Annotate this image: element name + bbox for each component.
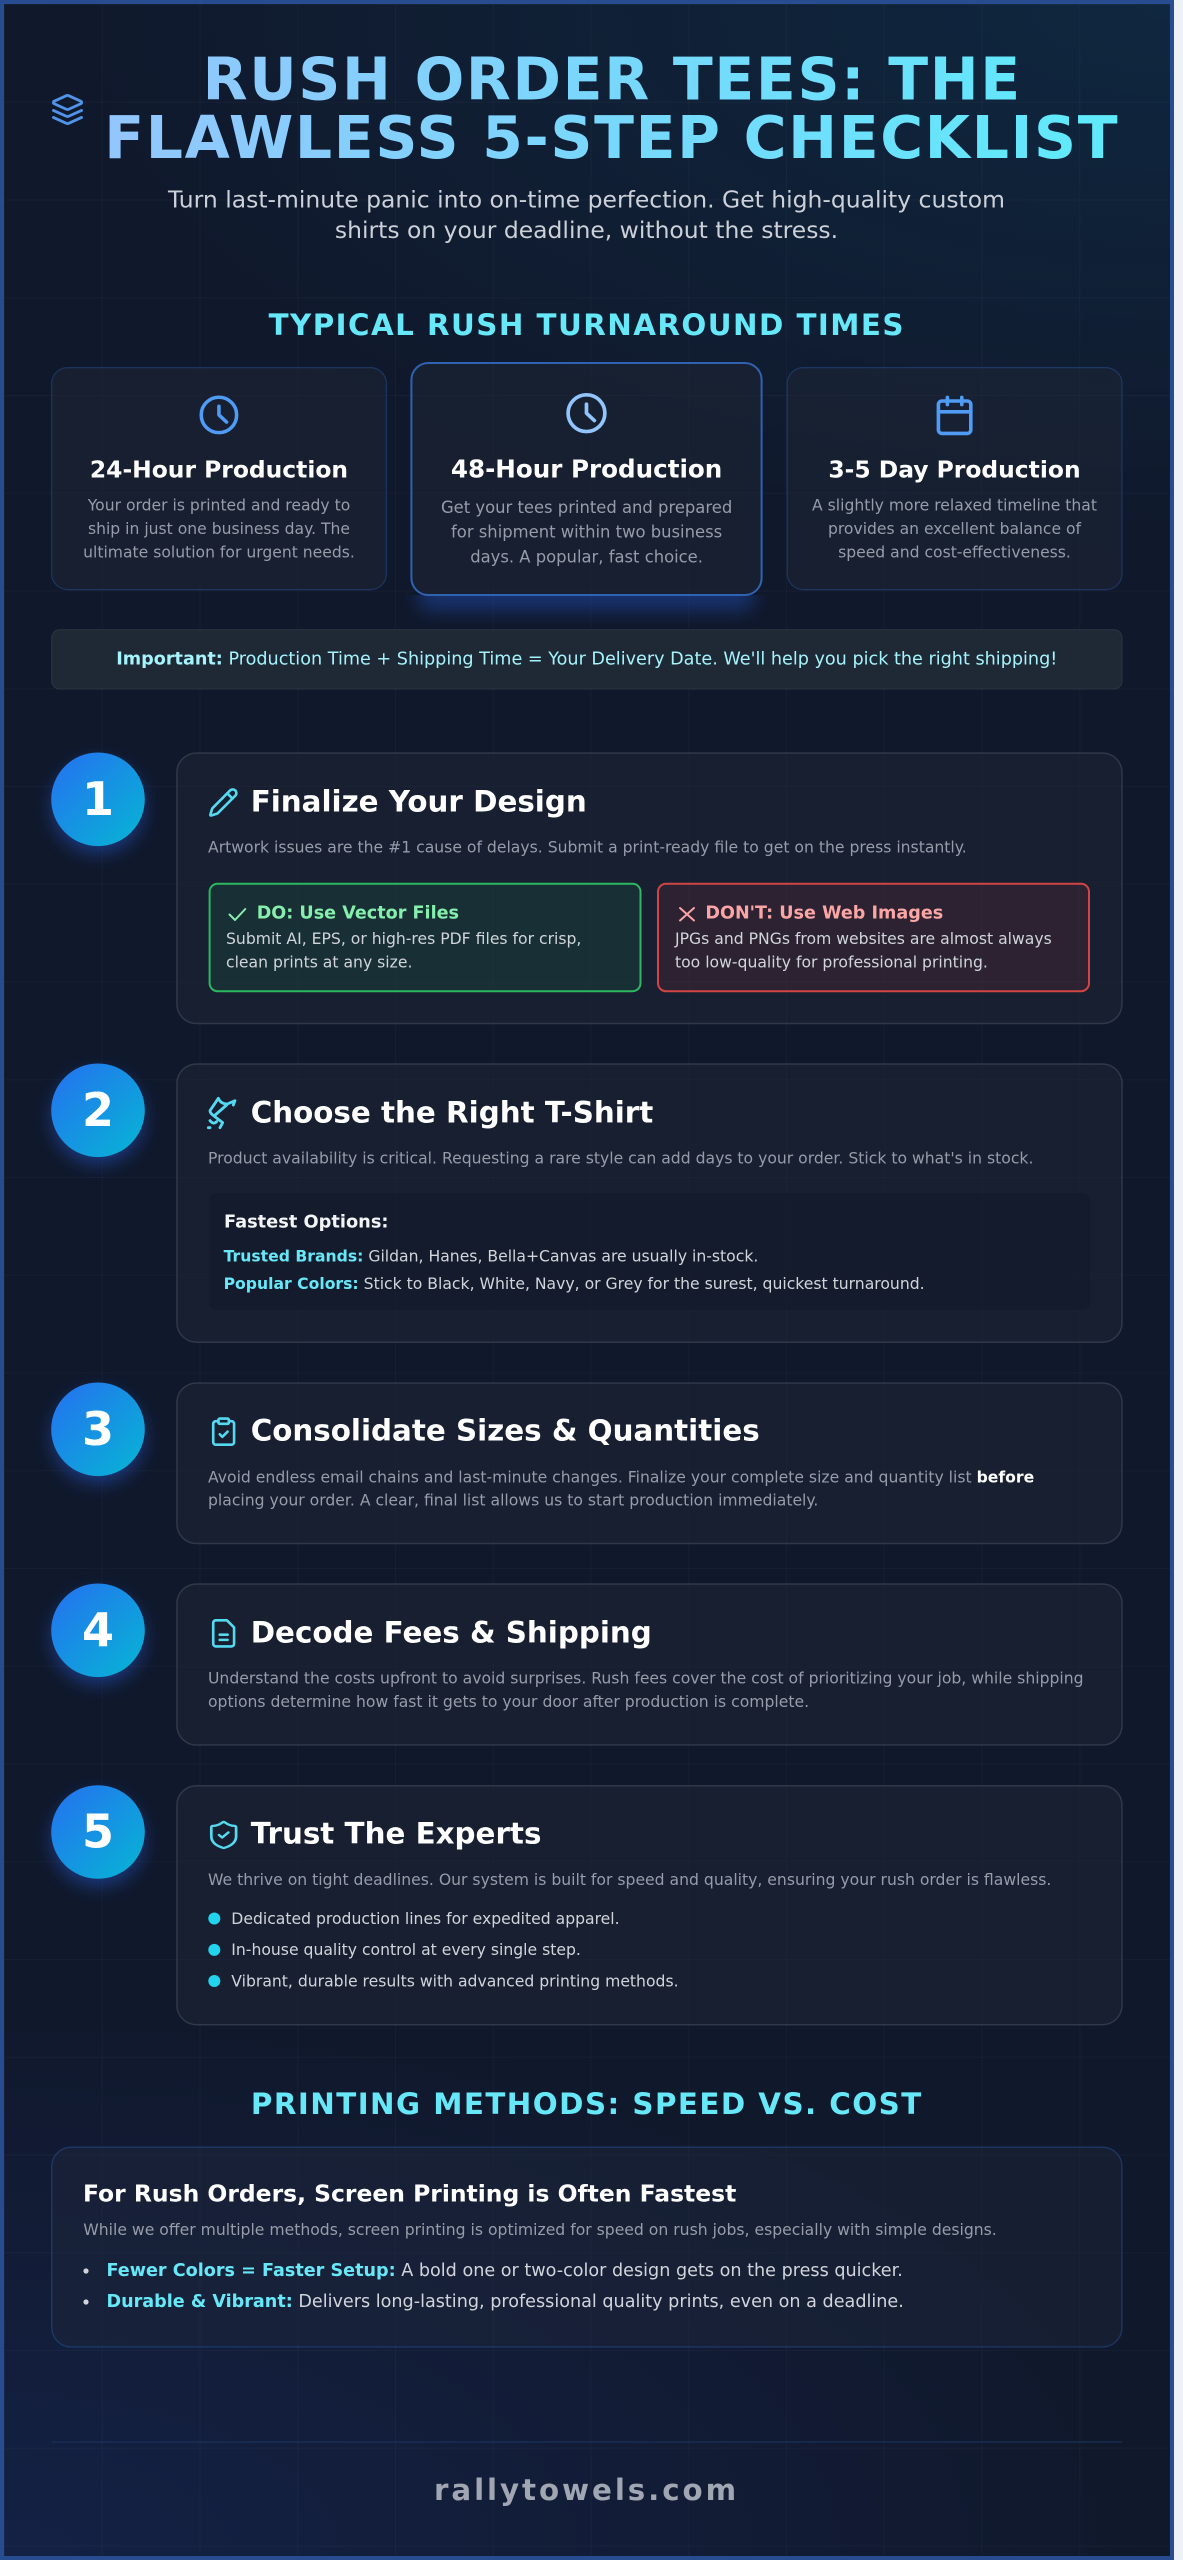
- badge: 3: [51, 1382, 145, 1483]
- step 5: trust the experts: [51, 1785, 1122, 2025]
- card: 24-hour production: 24-Hour Production: [90, 456, 348, 484]
- description: placing your order. A clear, final list allows us to start production immediately.: [208, 1491, 818, 1510]
- description: Artwork issues are the #1 cause of delays. Submit a print-ready file to get on the press instantly.: [208, 838, 967, 857]
- description: options determine how fast it gets to your door after production is complete.: [208, 1692, 809, 1711]
- description: We thrive on tight deadlines. Our system is built for speed and quality, ensuring your rush order is flawless.: [208, 1870, 1051, 1889]
- subtitle: Turn last-minute panic into on-time perfection. Get high-quality custom: [167, 186, 1005, 214]
- title: FLAWLESS 5-STEP CHECKLIST: [104, 104, 1119, 172]
- checklist: [208, 1909, 679, 1990]
- subtitle: [167, 186, 1005, 244]
- step 1: finalize your design: [51, 752, 1122, 1024]
- badge: 1: [51, 752, 145, 853]
- panel description: While we offer multiple methods, screen printing is optimized for speed on rush jobs, especially with simple designs.: [83, 2220, 997, 2239]
- panel: step 3: [177, 1383, 1122, 1544]
- fastest options box: Fastest Options:: [224, 1212, 389, 1233]
- panel: turnaround cards: [52, 363, 1122, 611]
- heading: Consolidate Sizes & Quantities: [251, 1414, 760, 1448]
- description: Avoid endless email chains and last-minute changes. Finalize your complete size and quantity list before: [208, 1467, 1034, 1486]
- card: 48-hour production, highlighted: for shipment within two business: [451, 523, 722, 542]
- heading: Trust The Experts: [251, 1817, 541, 1851]
- badge: 5: [51, 1785, 145, 1886]
- heading: printing methods: PRINTING METHODS: SPEED VS. COST: [251, 2087, 923, 2121]
- card: 24-hour production: ultimate solution for urgent needs.: [83, 544, 355, 562]
- description: [208, 1467, 1034, 1510]
- don't box: JPGs and PNGs from websites are almost always: [674, 929, 1052, 948]
- fastest options box: [208, 1193, 1090, 1310]
- card: 24-hour production: [52, 368, 386, 590]
- heading: typical rush turnaround times: TYPICAL RUSH TURNAROUND TIMES: [269, 308, 905, 342]
- badge: 1: 1: [82, 772, 114, 826]
- card: 48-hour production, highlighted: [411, 363, 762, 611]
- do box: [210, 884, 640, 991]
- icon: shirt glyph: [208, 1098, 235, 1128]
- subtitle: shirts on your deadline, without the stress.: [335, 216, 838, 244]
- fastest options box: Trusted Brands: Gildan, Hanes, Bella+Canvas are usually in-stock.: [224, 1247, 758, 1266]
- card: 3-5 day production: [787, 368, 1122, 590]
- card: 48-hour production, highlighted: days. A popular, fast choice.: [470, 547, 703, 566]
- checklist: Vibrant, durable results with advanced printing methods.: [231, 1971, 679, 1990]
- panel: step 2: [177, 1064, 1122, 1342]
- don't box: too low-quality for professional printing.: [675, 952, 988, 971]
- header: [53, 46, 1119, 244]
- do box: Submit AI, EPS, or high-res PDF files for crisp,: [226, 929, 581, 948]
- icon: pencil: [210, 789, 236, 815]
- description: Understand the costs upfront to avoid surprises. Rush fees cover the cost of prioritizing your job, while shipping: [208, 1668, 1084, 1688]
- badge: 5: 5: [82, 1805, 114, 1859]
- icon: shield check: [211, 1822, 236, 1848]
- callout: important delivery note: [52, 630, 1122, 689]
- card: 3-5 day production: provides an excellent balance of: [828, 520, 1082, 538]
- fastest options box: Popular Colors: Stick to Black, White, Navy, or Grey for the surest, quickest turnaround.: [224, 1274, 925, 1293]
- badge: 4: [51, 1584, 145, 1684]
- description: Product availability is critical. Requesting a rare style can add days to your order. Stick to what's in stock.: [208, 1149, 1033, 1168]
- don't box: DON'T: Use Web Images: [705, 903, 943, 923]
- callout: important delivery note: Important: Production Time + Shipping Time = Your Delivery Date. We'll help you pick the right shipping!: [116, 649, 1057, 669]
- step 3: consolidate sizes and quantities: [51, 1382, 1122, 1544]
- panel heading: For Rush Orders, Screen Printing is Often Fastest: [83, 2180, 736, 2208]
- panel: step 5: [177, 1786, 1122, 2025]
- description: [208, 1668, 1084, 1711]
- title: [104, 46, 1119, 172]
- card: 24-hour production: ship in just one business day. The: [88, 520, 350, 538]
- icon: layers: [53, 95, 82, 124]
- panel: printing methods: [52, 2147, 1122, 2347]
- badge: 2: [51, 1064, 145, 1164]
- do box: DO: Use Vector Files: [257, 903, 459, 923]
- heading: Finalize Your Design: [251, 784, 587, 818]
- do box: clean prints at any size.: [226, 952, 412, 971]
- checklist: Dedicated production lines for expedited apparel.: [231, 1909, 620, 1928]
- badge: 4: 4: [82, 1603, 114, 1657]
- step 2: choose the right t-shirt: [51, 1064, 1122, 1342]
- don't box: [658, 884, 1089, 991]
- footer: rallytowels.com: [434, 2473, 739, 2507]
- card: 3-5 day production: 3-5 Day Production: [828, 456, 1081, 484]
- bullet list: Fewer Colors = Faster Setup: A bold one or two-color design gets on the press quicker.: [106, 2261, 903, 2281]
- panel: step 4: [177, 1584, 1122, 1745]
- card: 48-hour production, highlighted: 48-Hour Production: [451, 454, 722, 484]
- badge: 3: 3: [82, 1402, 114, 1456]
- card: 24-hour production: Your order is printed and ready to: [87, 497, 350, 515]
- title: RUSH ORDER TEES: THE: [203, 46, 1022, 114]
- heading: Choose the Right T-Shirt: [251, 1095, 653, 1129]
- panel: step 1: [177, 753, 1122, 1024]
- bullet list: Durable & Vibrant: Delivers long-lasting, professional quality prints, even on a deadline.: [106, 2292, 904, 2312]
- card: 3-5 day production: speed and cost-effectiveness.: [838, 544, 1071, 562]
- bullet list: [83, 2261, 904, 2312]
- icon: file text: [213, 1620, 234, 1646]
- badge: 2: 2: [82, 1083, 114, 1137]
- icon: clipboard check: [213, 1419, 234, 1445]
- heading: Decode Fees & Shipping: [251, 1615, 652, 1649]
- card: 48-hour production, highlighted: Get your tees printed and prepared: [441, 498, 732, 517]
- card: 3-5 day production: A slightly more relaxed timeline that: [812, 497, 1097, 515]
- checklist: In-house quality control at every single step.: [231, 1940, 581, 1959]
- step 4: decode fees and shipping: [51, 1584, 1122, 1745]
